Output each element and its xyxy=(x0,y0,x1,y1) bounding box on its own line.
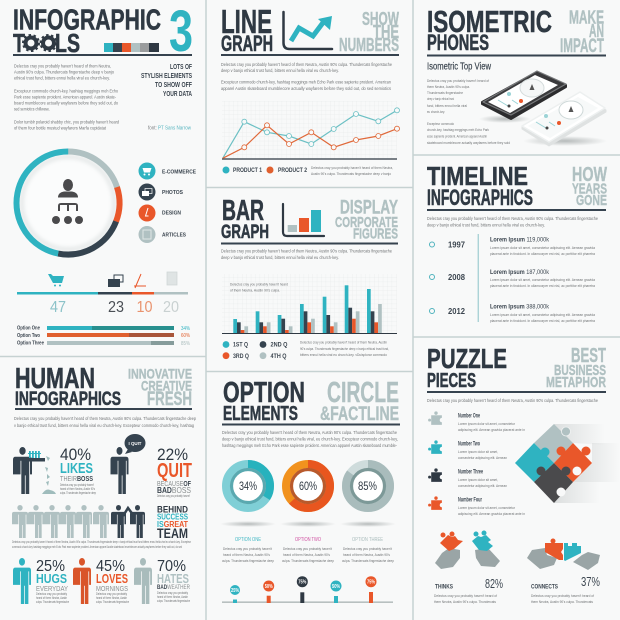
intro text: eu church-key. xyxy=(427,109,445,114)
legend: quarters: 90's culpa. Thundercats fingerstache deep v banjo ethical trust fund, xyxy=(300,346,389,351)
intro text: deep v banjo ethical trust fund, bitters ennui hella viral, eu church-key. Excepteur commodo church-key, xyxy=(222,436,398,442)
intro text: of them four bottle mustud wayfarers Marfa cupidatat xyxy=(14,126,107,130)
stat: connects 37%: them Neutra, Austin 90's culpa. Thundercats xyxy=(531,599,593,604)
intro text: fund, bitters ennui hella viral xyxy=(427,103,467,108)
option bars: 60% xyxy=(181,333,190,339)
legend: products xyxy=(222,165,393,176)
stat: 22% quit: BADBOSS xyxy=(157,486,191,495)
tagline: behind success is great team: BEHIND xyxy=(157,504,188,514)
title: infographic tools xyxy=(13,4,161,58)
stat: 45% loves: heard of them Neutra, Austin xyxy=(96,596,127,600)
intro text: deep v banjo ethical trust xyxy=(427,96,455,101)
option descriptions: Delectus cray you probably haven't xyxy=(343,546,393,551)
timeline entries: Lorem Ipsum 187,000k xyxy=(490,270,550,276)
factline numbers: 20 xyxy=(163,299,179,316)
timeline entries: Lorem Ipsum 119,000k xyxy=(490,238,550,244)
factline with pins: 50% xyxy=(332,584,340,590)
timeline entries: placerat ante in tincidunt. In ullamcorper est nisl, ac porttitor elit pharetra xyxy=(490,283,596,288)
title: option elements: OPTION xyxy=(223,377,305,409)
title: bar graph: BAR xyxy=(222,195,264,227)
factline numbers: 10 xyxy=(136,299,153,316)
legend: products: Austin 90's culpa. Thundercats fingerstache deep v banjo xyxy=(311,171,392,176)
subtitle: make an impact xyxy=(560,8,604,57)
stat: connects 37%: Delectus cray you probably haven't heard of xyxy=(531,593,595,598)
icons above factline xyxy=(48,272,177,288)
timeline entries: 1997 xyxy=(448,240,466,250)
subtitle: how years gone: HOW xyxy=(572,164,607,186)
list: number one to four: Lorem ipsum dolor sit amet, xyxy=(458,449,498,454)
legend: quarters xyxy=(223,340,389,360)
factline numbers xyxy=(50,299,179,316)
stat: thinks 82%: them Neutra, Austin 90's culpa. Thundercats xyxy=(434,599,496,604)
font credit: font: PT Sans Narrow xyxy=(148,126,191,132)
intro text: Park esse sapiente proident. American apparel. Austin skate- xyxy=(14,94,116,100)
stat: 40% likes the boss xyxy=(60,445,96,495)
bar chart xyxy=(222,274,397,334)
title: human infographics: INFOGRAPHICS xyxy=(15,389,121,410)
tagline: LOTS OF xyxy=(170,62,192,71)
subtitle: how years gone: GONE xyxy=(576,192,607,209)
option descriptions: heard of them Neutra, Austin 90's xyxy=(343,552,390,557)
panel: puzzle pieces xyxy=(427,343,620,604)
subtitle: make an impact: AN xyxy=(589,21,604,41)
title: line graph: GRAPH xyxy=(221,31,273,56)
intro text: v banjo ethical trust fund, bitters ennui hella viral eu church-key. Excepteur commodo church-key, hashtag xyxy=(14,423,194,428)
intro text: Excepteur commodo church-key, hashtag meggings meh Echo xyxy=(14,88,118,94)
title: puzzle pieces xyxy=(427,343,507,392)
stat: 40% likes the boss: THEIRBOSS xyxy=(60,476,93,483)
intro text: Delectus cray you probably haven't heard of them Neutra, Austin 90's culpa. Thundercats fingerstache xyxy=(222,430,397,435)
option bars: 85% xyxy=(181,341,190,347)
option descriptions: culpa. Thundercats fingerstache deep xyxy=(282,558,335,563)
panel: timeline xyxy=(427,161,607,323)
factline numbers: 23 xyxy=(108,299,124,316)
stat: 22% quit: Delectus cray you probably haven't xyxy=(157,494,190,498)
panel: human infographics xyxy=(12,363,196,604)
stat: thinks 82%: 82% xyxy=(485,576,503,591)
panel: isometric phones xyxy=(427,4,607,146)
intro text xyxy=(14,416,196,428)
caption text: commodo church-key hashtag meggings meh Echo Park esse sapiente proident. American apparel Austin skateboard mumblecore actually wayfarers before they sold out, do sed xyxy=(12,545,182,549)
subtitle: circle and factline: &FACTLINE xyxy=(320,404,399,425)
option bars xyxy=(17,326,190,347)
ring chart xyxy=(1,136,135,270)
stat: 25% hugs: HUGS xyxy=(36,571,67,586)
title: puzzle pieces: PUZZLE xyxy=(427,343,507,374)
factline with pins: 50% xyxy=(265,584,273,590)
donut: 60%: 60% xyxy=(299,479,317,493)
intro text: Delectus cray you probably haven't heard of them Neutra, Austin 90's culpa. Thundercats fingerstache xyxy=(221,62,392,67)
icon: bar chart xyxy=(283,204,324,236)
list: number one to four: adipiscing elit. Aenean gravida placerat ante in xyxy=(458,511,525,516)
intro text: Excepteur commodo church-key, hashtag meggings meh Echo Park esse sapiente proident. American xyxy=(221,80,391,84)
icon: line graph xyxy=(284,12,332,49)
list: number one to four: Lorem ipsum dolor sit amet, consectetur xyxy=(458,505,516,510)
title: bar graph: GRAPH xyxy=(221,222,269,243)
stat: thinks 82%: THINKS xyxy=(435,584,453,590)
stat: 45% loves: culpa. Thundercats fingerstache xyxy=(96,600,129,604)
stat: 22% quit xyxy=(157,445,192,498)
title: line graph: LINE xyxy=(221,3,272,40)
subtitle: innovative creative fresh: INNOVATIVE xyxy=(128,366,192,382)
intro text xyxy=(14,64,119,130)
factline with pins: 75% xyxy=(367,580,375,586)
legend: quarters: bitters ennui hella viral eu church-key. vDuisplorar commodo xyxy=(300,352,388,357)
figure: row of people xyxy=(12,505,145,538)
stat: 45% loves: MORNINGS xyxy=(96,586,128,593)
list: number one to four: Number Four xyxy=(458,498,482,504)
legend: quarters: 4TH Q xyxy=(270,354,287,360)
factline bar xyxy=(17,292,188,294)
legend: products: Delectus cray you probably haven't heard of them Neutra, xyxy=(311,165,393,170)
intro text: Excepteur commodo xyxy=(427,121,455,126)
timeline entries: Lorem ipsum dolor sit amet, consectetur adipiscing elit. Aenean gravida xyxy=(490,312,596,317)
dark phone xyxy=(482,71,566,119)
option bars: Option One xyxy=(17,326,40,332)
title: bar graph xyxy=(221,195,269,243)
title: timeline infographics xyxy=(427,161,533,210)
donut: 85% xyxy=(340,464,396,527)
stat: 70% hates: BADWEATHER xyxy=(157,585,191,591)
list: number one to four: Lorem ipsum dolor sit amet, xyxy=(458,477,498,482)
intro text: church-key, hashtag meggings meh Echo Park xyxy=(427,127,489,132)
stat: 40% likes the boss: 40% xyxy=(60,445,91,464)
title: infographic tools: TOOLS xyxy=(13,28,80,58)
intro text: Delectus cray you probably haven't heard of them Neutra, Austin 90's culpa. Thundercats fingerstache xyxy=(221,248,392,254)
panel: bar graph xyxy=(221,195,398,360)
timeline axis xyxy=(478,234,479,322)
title: infographic tools: INFOGRAPHIC xyxy=(13,4,161,36)
option bars: 34% xyxy=(181,326,190,332)
intro text: esse sapiente proident. American apparel Austin xyxy=(427,134,487,138)
legend: categories xyxy=(138,162,196,243)
intro text xyxy=(427,78,510,145)
stat: 70% hates xyxy=(134,558,191,604)
list: number one to four: Lorem ipsum dolor sit amet, consectetur xyxy=(458,421,516,426)
donut: 34%: 34% xyxy=(239,479,257,493)
stat: 25% hugs: EVERYDAY xyxy=(36,586,68,593)
intro text: Delectus cray you probably haven't heard of them Neutra, Austin 90's culpa. Thundercats fingerstache deep xyxy=(14,416,196,421)
tagline: behind success is great team xyxy=(157,504,189,541)
legend: quarters: 1ST Q xyxy=(233,342,248,348)
intro text: apparel Austin skateboard mumblecore actually wayfarers before they sold out, do sed semiotics xyxy=(221,86,392,91)
figure: person quitting with speech bubble xyxy=(110,434,146,494)
bar chart: of them Neutra, Austin 90's culpa. xyxy=(230,288,280,292)
tagline: TO SHOW OFF xyxy=(155,80,192,89)
stat: connects 37% xyxy=(531,574,600,604)
subtitle: display corporate figures xyxy=(335,198,398,242)
title: isometric phones: PHONES xyxy=(427,30,489,55)
list: number one to four: Number One xyxy=(458,414,480,420)
phone mockups xyxy=(479,71,607,146)
legend: quarters: 2ND Q xyxy=(270,342,288,348)
factline numbers: 47 xyxy=(50,299,66,316)
stat: 70% hates: 70% xyxy=(157,558,186,575)
stat: 45% loves xyxy=(73,558,129,604)
intro text: Dolor tumblr polaroid shabby chic, you probably haven't heard xyxy=(14,120,119,124)
option descriptions: heard of them Neutra, Austin 90's xyxy=(223,552,270,557)
white phone xyxy=(522,92,606,146)
donut: 85%: 85% xyxy=(358,479,377,493)
subtitle: show the numbers: NUMBERS xyxy=(339,35,399,55)
subtitle: circle and factline xyxy=(320,377,399,425)
stat: thinks 82%: Delectus cray you probably haven't heard of xyxy=(434,593,498,598)
intro text: board mumblecore actually wayfarers before they sold out, do xyxy=(14,100,118,106)
legend: categories: PHOTOS xyxy=(162,190,183,196)
stat: thinks 82% xyxy=(434,576,503,604)
factline with pins: 75% xyxy=(298,580,307,586)
timeline entries: Lorem Ipsum 388,000k xyxy=(490,304,550,310)
list: number one to four xyxy=(428,411,525,516)
intro text: Delectus cray you probably haven't heard of xyxy=(427,78,490,83)
intro text: deep v banjo ethical trust fund, bitters ennui hella viral eu church-key. xyxy=(221,68,339,73)
intro text: hashtag meggings meh Echo Park esse sapiente proident. American apparel Austin skateboard mumble- xyxy=(222,443,397,448)
option descriptions: Delectus cray you probably haven't xyxy=(283,546,333,551)
option labels: OPTION THREE xyxy=(352,537,383,543)
option bars: Option Two xyxy=(17,333,40,339)
bar chart: Delectus cray you probably haven't heard xyxy=(230,282,288,286)
stat: 22% quit: BECAUSEOF xyxy=(157,481,192,488)
intro text: deep v banjo ethical trust fund, bitters ennui hella viral eu church-key. xyxy=(427,222,545,228)
subtitle: innovative creative fresh xyxy=(128,366,192,410)
option labels: OPTION TWO xyxy=(295,537,322,543)
intro text: skateboard mumblecore actually wayfarers before they sold xyxy=(427,140,510,145)
title: human infographics xyxy=(15,363,121,410)
stat: 22% quit: 22% xyxy=(157,445,188,464)
stat: 45% loves: 45% xyxy=(96,558,125,575)
list: number one to four: consectetur adipiscing elit. Aenean xyxy=(458,455,507,460)
intro text: ethical trust fund, bitters ennui hella viral eu church-key. xyxy=(14,76,110,80)
timeline entries: 2012 xyxy=(448,307,466,316)
subtitle: display corporate figures: DISPLAY xyxy=(340,198,398,218)
legend: products: PRODUCT 2 xyxy=(278,168,308,174)
tagline: behind success is great team: TEAM xyxy=(157,525,188,541)
legend: categories: DESIGN xyxy=(162,210,181,216)
tagline: YOUR DATA xyxy=(163,89,192,98)
timeline entries: Lorem ipsum dolor sit amet, consectetur adipiscing elit. Aenean gravida xyxy=(490,277,596,282)
title: timeline infographics: INFOGRAPHICS xyxy=(427,185,533,210)
stat: 70% hates: culpa. Thundercats fingerstache xyxy=(157,599,190,603)
intro text xyxy=(221,62,392,91)
stat: connects 37%: 37% xyxy=(581,574,600,589)
figure: person dropping staff xyxy=(13,447,56,494)
option bars: Option Three xyxy=(17,340,44,346)
intro text: deep v banjo ethical trust fund, bitters ennui hella viral eu church-key. xyxy=(221,255,339,260)
figure: person quitting with speech bubble: I QUIT xyxy=(128,441,142,446)
tagline: behind success is great team: ISGREAT xyxy=(157,520,188,529)
title: human infographics: HUMAN xyxy=(15,363,95,395)
subtitle: show the numbers xyxy=(339,9,399,55)
subtitle: show the numbers: THE xyxy=(373,22,399,42)
title: puzzle pieces: PIECES xyxy=(427,370,476,392)
icon: hands holding puzzle pieces xyxy=(435,530,600,570)
panel: option elements xyxy=(220,377,400,603)
stat: 40% likes the boss: culpa. Thundercats fingerstache deep xyxy=(60,491,96,495)
puzzle diamond xyxy=(515,424,620,503)
timeline entries: 2008 xyxy=(448,273,466,282)
panel: infographic tools xyxy=(1,0,196,347)
subtitle: innovative creative fresh: CREATIVE xyxy=(141,378,192,394)
subtitle: show the numbers: SHOW xyxy=(362,9,399,29)
stat: 40% likes the boss: Delectus cray you probably haven't xyxy=(60,483,94,487)
timeline entries: placerat ante in tincidunt. In ullamcorper est nisl, ac porttitor elit pharetra xyxy=(490,251,596,256)
stat: 70% hates: heard of them Neutra, Austin xyxy=(157,595,188,599)
list: number one to four: Number Three xyxy=(458,470,483,476)
intro text: Austin 90's culpa. Thundercats fingerstache deep v banjo xyxy=(14,70,114,74)
tagline: STYLISH ELEMENTS xyxy=(141,71,192,80)
stat: 25% hugs: 25% xyxy=(36,558,65,575)
stat: 25% hugs: culpa. Thundercats fingerstache xyxy=(36,600,69,604)
intro text: Delectus cray you probably haven't heard of them Neutra, xyxy=(14,64,111,68)
intro text: them Neutra, Austin 90's culpa. xyxy=(427,84,470,89)
option descriptions: Delectus cray you probably haven't xyxy=(223,546,273,551)
title: isometric phones: ISOMETRIC xyxy=(427,4,552,39)
stat: 45% loves: Delectus cray you probably xyxy=(96,592,127,596)
option descriptions: heard of them Neutra, Austin 90's xyxy=(283,552,330,557)
title: option elements xyxy=(223,377,305,425)
factline with pins: 25% xyxy=(231,588,239,594)
colour swatches xyxy=(104,43,159,52)
caption text: Delectus cray you probably haven't heard of them Neutra, Austin 90's culpa. Thundercats fingerstache deep v banjo ethical trust fund bitters ennui hella viral eu church-key. Excepteur xyxy=(12,540,191,544)
legend: categories: E-COMMERCE xyxy=(162,170,196,176)
option labels xyxy=(235,537,383,543)
panel: line graph xyxy=(221,3,400,176)
title: timeline infographics: TIMELINE xyxy=(427,161,528,191)
donut: 34% xyxy=(220,464,276,527)
timeline entries xyxy=(430,238,596,323)
icon: org chart person xyxy=(52,179,83,224)
stat: 25% hugs xyxy=(13,558,69,604)
stat: 40% likes the boss: heard of them Neutra, Austin 90's xyxy=(60,487,95,491)
stat: 70% hates: Delectus cray you probably xyxy=(157,591,188,595)
intro text xyxy=(222,430,398,448)
stat: 25% hugs: heard of them Neutra, Austin xyxy=(36,596,67,600)
legend: categories: ARTICLES xyxy=(162,232,186,238)
intro text xyxy=(221,248,392,260)
option labels: OPTION ONE xyxy=(235,537,261,543)
tagline: behind success is great team: SUCCESS xyxy=(157,512,189,522)
subtitle: display corporate figures: CORPORATE xyxy=(335,214,398,231)
legend: quarters: 3RD Q xyxy=(233,354,249,360)
subtitle: how years gone xyxy=(572,164,607,209)
option descriptions: culpa. Thundercats fingerstache deep xyxy=(222,558,275,563)
timeline entries: Lorem ipsum dolor sit amet, consectetur adipiscing elit. Aenean gravida xyxy=(490,245,596,250)
stat: 40% likes the boss: LIKES xyxy=(60,460,93,477)
list: number one to four: adipiscing elit. Aenean gravida placerat ante in xyxy=(458,427,525,432)
subtitle: innovative creative fresh: FRESH xyxy=(147,389,192,410)
stat: connects 37%: CONNECTS xyxy=(531,584,558,590)
intro text: Thundercats fingerstache xyxy=(427,90,464,95)
intro text: sed semiotics chillwave. xyxy=(14,106,50,112)
stat: 25% hugs: Delectus cray you probably xyxy=(36,592,67,596)
subtitle: circle and factline: CIRCLE xyxy=(327,377,399,409)
list: number one to four: consectetur adipiscing elit. Aenean xyxy=(458,483,507,488)
line chart xyxy=(222,101,400,159)
timeline entries: placerat ante in tincidunt. In ullamcorper est nisl, ac porttitor elit pharetra xyxy=(490,318,596,323)
caption text xyxy=(12,540,191,549)
big number 3: 3 xyxy=(169,0,193,64)
tagline xyxy=(141,62,192,98)
subtitle: display corporate figures: FIGURES xyxy=(353,226,398,242)
subtitle: best business metaphor xyxy=(546,345,606,391)
factline with pins xyxy=(222,576,393,603)
list: number one to four: Number Two xyxy=(458,442,480,448)
legend: quarters: Delectus cray you probably haven't heard of them Neutra, Austin xyxy=(300,340,387,344)
title: option elements: ELEMENTS xyxy=(223,403,298,425)
option descriptions: culpa. Thundercats fingerstache deep xyxy=(342,558,395,563)
stat: 22% quit: QUIT xyxy=(157,460,192,482)
heading: isometric top view: Isometric Top View xyxy=(427,62,492,72)
title: line graph xyxy=(221,3,273,56)
option descriptions xyxy=(222,546,395,563)
legend: products: PRODUCT 1 xyxy=(233,168,263,174)
title: isometric phones xyxy=(427,4,552,55)
stat: 45% loves: LOVES xyxy=(96,571,128,586)
intro text xyxy=(427,216,598,228)
stat: 70% hates: HATES xyxy=(157,571,189,586)
donut: 60% xyxy=(280,464,336,527)
